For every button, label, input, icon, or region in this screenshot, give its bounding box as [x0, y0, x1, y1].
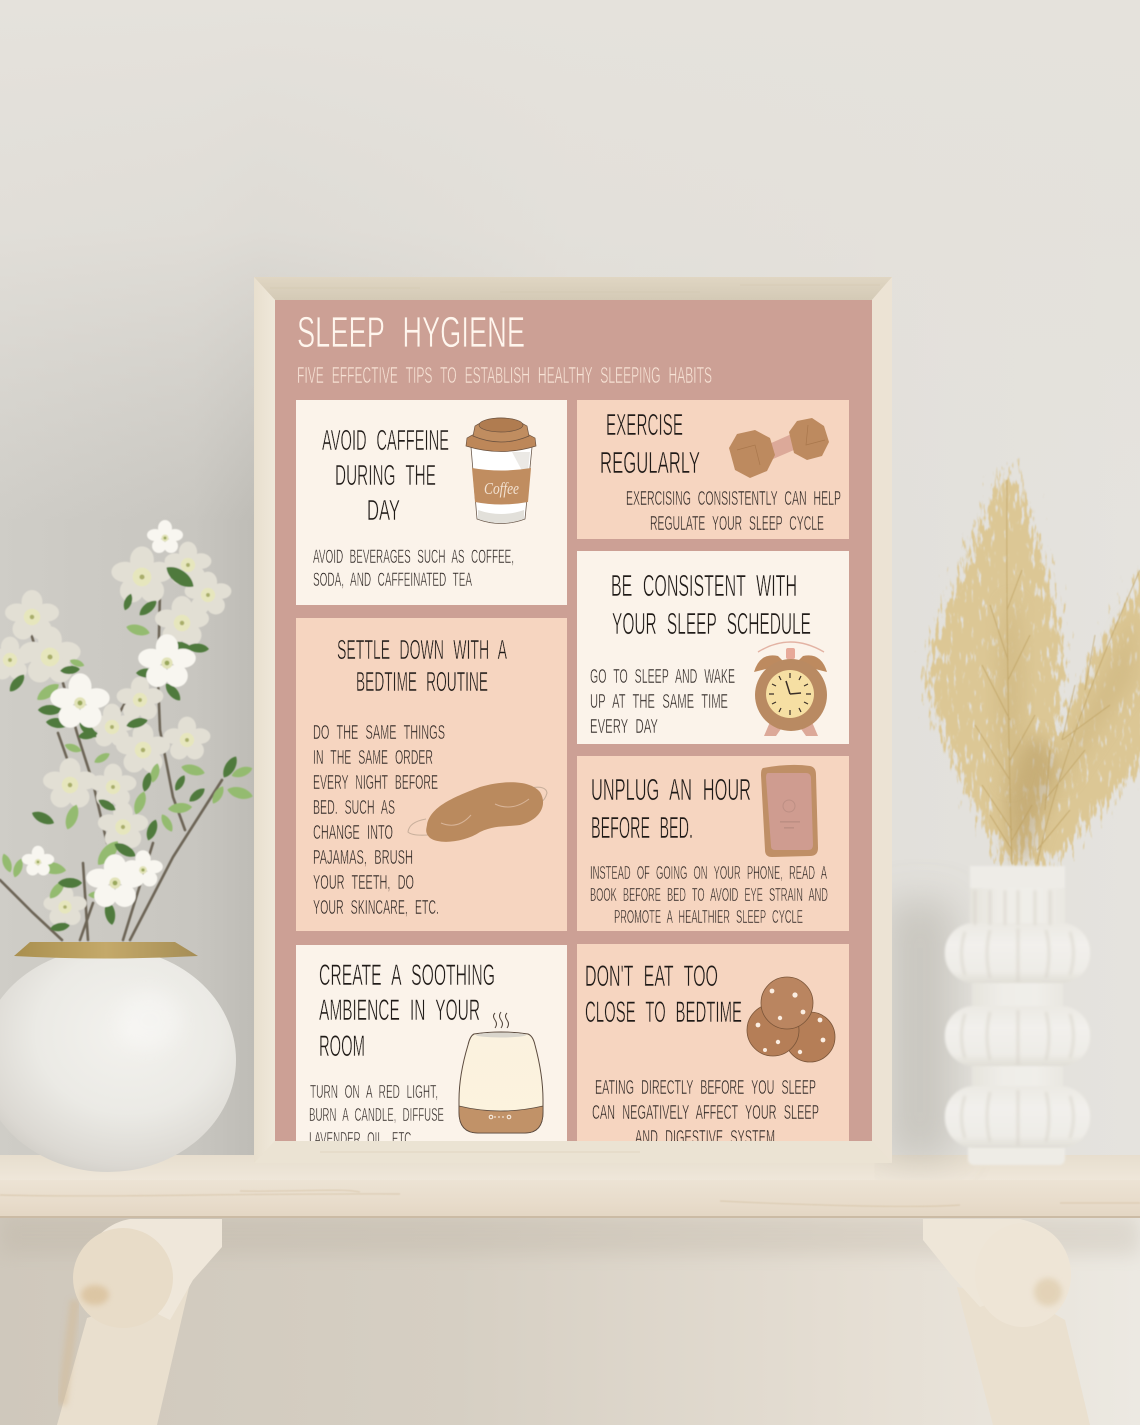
text: bedtime routine: YOUR TEETH, DO	[313, 872, 414, 894]
panel: don't eat too close	[577, 944, 849, 1149]
heading: soothing ambience	[319, 959, 495, 1063]
right shelf leg	[923, 1219, 1090, 1425]
left shelf leg	[57, 1219, 222, 1425]
text: unplug: PROMOTE A HEALTHIER SLEEP CYCLE	[614, 907, 803, 927]
text: unplug: INSTEAD OF GOING ON YOUR PHONE, READ A	[590, 863, 827, 883]
icon: coffee cup: Coffee	[484, 479, 519, 498]
text: avoid caffeine: SODA, AND CAFFEINATED TEA	[313, 570, 472, 591]
heading: bedtime routine: BEDTIME ROUTINE	[356, 666, 488, 697]
heading: unplug	[591, 772, 751, 845]
text: consistent schedule	[590, 666, 735, 738]
text: bedtime routine: CHANGE INTO	[313, 822, 393, 844]
heading: avoid caffeine: AVOID CAFFEINE	[322, 425, 449, 457]
heading: unplug: UNPLUG AN HOUR	[591, 772, 751, 807]
text: exercise regularly: EXERCISING CONSISTENTLY CAN HELP	[626, 488, 841, 510]
heading: soothing ambience: ROOM	[319, 1030, 365, 1063]
heading: don't eat	[585, 960, 742, 1029]
panel: exercise regularly	[577, 400, 849, 539]
text: avoid caffeine	[313, 547, 514, 591]
wooden shelf	[0, 1155, 1140, 1218]
icon: coffee cup	[466, 418, 536, 524]
panel: soothing ambience	[296, 945, 567, 1149]
pampas grass	[922, 450, 1140, 880]
text: soothing ambience: TURN ON A RED LIGHT,	[310, 1082, 438, 1102]
text: exercise regularly	[626, 488, 841, 535]
icon: dumbbell	[729, 418, 829, 478]
picture frame	[254, 277, 892, 1163]
text: exercise regularly: REGULATE YOUR SLEEP CYCLE	[650, 513, 824, 535]
text: consistent schedule: GO TO SLEEP AND WAKE	[590, 666, 735, 688]
heading: consistent schedule	[611, 568, 811, 641]
heading: bedtime routine: SETTLE DOWN WITH A	[337, 634, 507, 665]
text: bedtime routine: YOUR SKINCARE, ETC.	[313, 897, 439, 919]
icon: phone	[761, 765, 818, 857]
text: unplug: BOOK BEFORE BED TO AVOID EYE STRAIN AND	[590, 885, 828, 905]
white ribbed vase	[885, 866, 1090, 1165]
icon: cookies	[747, 977, 835, 1062]
text: bedtime routine: BED. SUCH AS	[313, 797, 395, 819]
text: soothing ambience: BURN A CANDLE, DIFFUSE	[309, 1105, 444, 1125]
text: bedtime routine	[313, 722, 445, 919]
text: consistent schedule: EVERY DAY	[590, 716, 658, 738]
panel: avoid caffeine	[296, 400, 567, 605]
text: bedtime routine: EVERY NIGHT BEFORE	[313, 772, 438, 794]
text: consistent schedule: UP AT THE SAME TIME	[590, 691, 728, 713]
text: don't eat	[592, 1077, 819, 1149]
heading: exercise regularly: EXERCISE	[606, 407, 683, 442]
subtitle: FIVE EFFECTIVE TIPS TO ESTABLISH HEALTHY SLEEPING HABITS	[297, 362, 712, 388]
plant: flowering branches	[0, 520, 254, 940]
poster background	[275, 300, 872, 1141]
panel: consistent sleep schedule	[577, 551, 849, 744]
heading: unplug: BEFORE BED.	[591, 810, 693, 845]
text: soothing ambience: LAVENDER OIL, ETC.	[309, 1129, 414, 1149]
icon: diffuser	[459, 1012, 543, 1133]
text: bedtime routine: PAJAMAS, BRUSH	[313, 847, 413, 869]
text: bedtime routine: DO THE SAME THINGS	[313, 722, 445, 744]
panel: consistent sleep schedule: YOUR SLEEP SCHEDULE	[612, 606, 811, 641]
heading: avoid caffeine: DAY	[367, 495, 400, 527]
heading: exercise regularly	[600, 407, 700, 480]
heading: avoid caffeine	[322, 425, 449, 527]
heading: avoid caffeine: DURING THE	[335, 460, 436, 492]
title: SLEEP HYGIENE	[297, 308, 525, 357]
panel: unplug	[577, 756, 849, 931]
panel: bedtime routine	[296, 618, 567, 931]
heading: bedtime routine	[337, 634, 507, 697]
icon: sleep mask	[408, 782, 547, 842]
text: bedtime routine: IN THE SAME ORDER	[313, 747, 433, 769]
heading: consistent schedule: BE CONSISTENT WITH	[611, 568, 797, 603]
text: avoid caffeine: AVOID BEVERAGES SUCH AS COFFEE,	[313, 547, 514, 568]
heading: don't eat: DON'T EAT TOO	[585, 960, 718, 993]
text: soothing ambience	[309, 1082, 444, 1149]
text: unplug	[590, 863, 828, 927]
icon: alarm clock	[754, 642, 827, 736]
white round vase with gold rim	[0, 942, 236, 1172]
heading: exercise regularly: REGULARLY	[600, 445, 700, 480]
